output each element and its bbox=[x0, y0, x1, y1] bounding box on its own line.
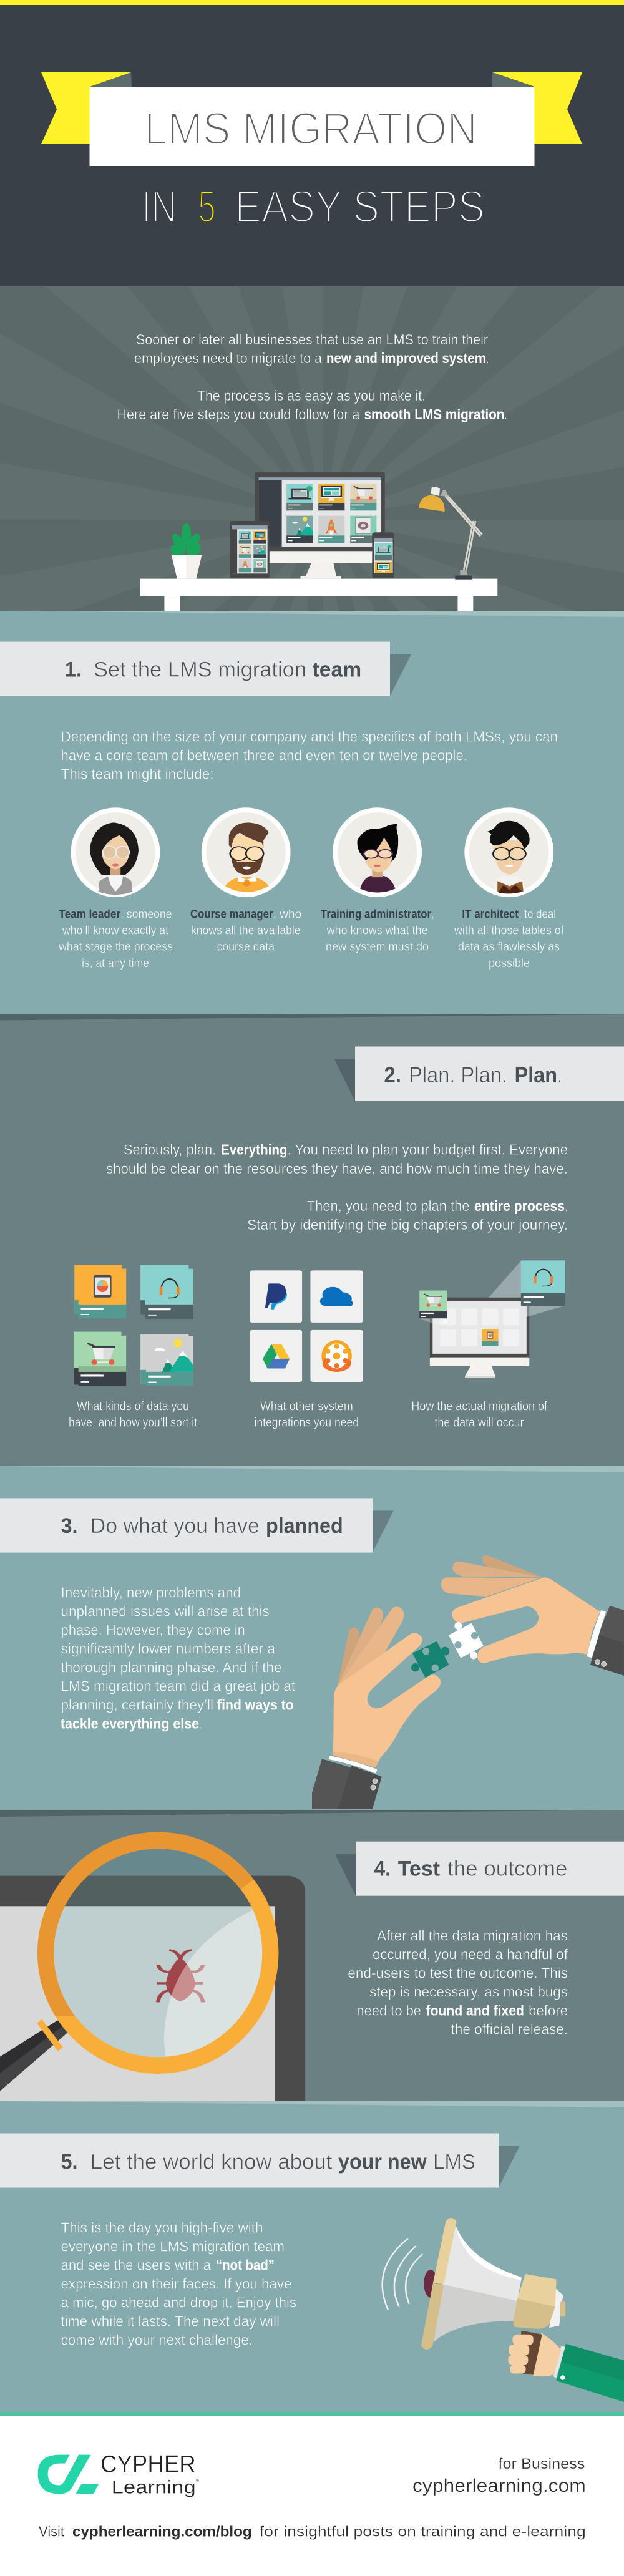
step 4 body text: step is necessary, as most bugs bbox=[369, 1984, 568, 2000]
step 5 body text: a mic, go ahead and drop it. Enjoy this bbox=[61, 2295, 296, 2311]
teal divider bbox=[0, 2412, 624, 2416]
card: moving headset bbox=[521, 1260, 565, 1306]
step 2 body text: entire process bbox=[474, 1198, 565, 1214]
caption: course manager: , who bbox=[273, 907, 301, 921]
caption: course manager bbox=[190, 907, 301, 954]
step 4 body text bbox=[348, 1928, 568, 2038]
logo tile: flower bbox=[310, 1330, 363, 1382]
magnifier ring bbox=[37, 1832, 278, 2074]
logo wordmark bbox=[100, 2451, 199, 2498]
heading: step 4: Test bbox=[398, 1857, 440, 1881]
blog link line: cypherlearning.com/blog bbox=[72, 2524, 252, 2540]
magnifier handle bbox=[0, 2019, 70, 2091]
top yellow bar bbox=[0, 0, 624, 5]
caption: course manager: knows all the available bbox=[191, 924, 301, 938]
icon: migration monitor bbox=[419, 1260, 565, 1378]
caption: data: What kinds of data you bbox=[77, 1400, 189, 1414]
step 3 body text: Inevitably, new problems and bbox=[61, 1585, 241, 1601]
step 3 body text: find ways to bbox=[217, 1697, 294, 1713]
illustration: desk with devices bbox=[140, 472, 497, 611]
avatar: course manager bbox=[202, 807, 291, 897]
heading: step 1 bbox=[0, 642, 411, 696]
caption: integrations bbox=[255, 1400, 359, 1429]
caption: integrations: integrations you need bbox=[255, 1416, 359, 1429]
desk bbox=[140, 579, 497, 611]
tablet frame bbox=[0, 1876, 305, 2101]
step 2 body text: Start by identifying the big chapters of your journey. bbox=[247, 1217, 568, 1233]
panel: header bbox=[0, 0, 624, 286]
step 4 body text: found and fixed bbox=[426, 2003, 524, 2019]
step 5 body text: This is the day you high-five with bbox=[61, 2220, 263, 2236]
card: headset bbox=[140, 1265, 193, 1319]
heading: step 5: LMS bbox=[433, 2151, 475, 2174]
panel: intro bbox=[0, 286, 624, 611]
step 3 body text: . bbox=[199, 1716, 202, 1732]
step 2 illustrations bbox=[74, 1260, 565, 1386]
card: tablet chart bbox=[74, 1265, 126, 1318]
title: LMS MIGRATION: LMS MIGRATION bbox=[144, 104, 477, 154]
step 2 body text: should be clear on the resources they have, and how much time they have. bbox=[106, 1160, 568, 1177]
magnifier lens bbox=[54, 1849, 262, 2057]
step 2 body text: Then, you need to plan the bbox=[307, 1198, 469, 1214]
caption: team leader: , someone bbox=[120, 907, 172, 921]
caption: training administrator: new system must do bbox=[326, 940, 429, 954]
caption: IT architect: data as flawlessly as bbox=[458, 940, 560, 954]
team avatars bbox=[71, 807, 553, 897]
intro text: new and improved system bbox=[326, 350, 486, 366]
illustration: magnifier over tablet bbox=[0, 1832, 306, 2101]
intro text: employees need to migrate to a bbox=[134, 350, 322, 366]
caption: course manager: course data bbox=[217, 940, 275, 954]
blog link line: Visit bbox=[39, 2524, 65, 2540]
step 1 body text bbox=[61, 729, 558, 782]
step 4 body text: end-users to test the outcome. This bbox=[348, 1965, 568, 1981]
icon: integration tiles bbox=[250, 1270, 363, 1382]
caption: training administrator bbox=[321, 907, 434, 954]
step 3 body text: LMS migration team did a great job at bbox=[61, 1678, 296, 1694]
subtitle: in 5 easy steps: IN bbox=[142, 182, 177, 232]
step 3 body text: thorough planning phase. And if the bbox=[61, 1660, 282, 1676]
heading: step 5: 5. bbox=[61, 2151, 77, 2174]
step 1 body text: This team might include: bbox=[61, 766, 213, 782]
caption: team leader: what stage the process bbox=[58, 940, 173, 954]
illustration: hands joining puzzle pieces bbox=[312, 1555, 624, 1809]
hand and sleeve bbox=[508, 2331, 624, 2402]
step 5 body text: and see the users with a bbox=[61, 2257, 211, 2273]
subtitle: in 5 easy steps: EASY STEPS bbox=[235, 182, 485, 232]
card: mountains bbox=[140, 1334, 193, 1386]
step 5 body text: everyone in the LMS migration team bbox=[61, 2238, 285, 2254]
caption: data: have, and how you’ll sort it bbox=[69, 1416, 197, 1429]
blog link line bbox=[39, 2524, 586, 2540]
bug icon bbox=[157, 1950, 203, 2002]
card: moving cart bbox=[419, 1291, 447, 1318]
intro text bbox=[117, 331, 507, 422]
caption: migration bbox=[411, 1400, 547, 1429]
heading: step 2: . bbox=[557, 1063, 562, 1087]
heading: step 4: 4. bbox=[374, 1857, 391, 1881]
heading: step 2: 2. bbox=[384, 1063, 401, 1087]
step 4 body text: before bbox=[529, 2003, 568, 2019]
icon: data kind cards bbox=[74, 1265, 193, 1386]
blog link line: for insightful posts on training and e-learning bbox=[260, 2524, 586, 2540]
step 3 body text: planning, certainly they’ll bbox=[61, 1697, 213, 1713]
avatar captions bbox=[58, 907, 564, 970]
course cards bbox=[286, 484, 376, 543]
website info: cypherlearning.com bbox=[412, 2476, 586, 2496]
intro text: Sooner or later all businesses that use an LMS to train their bbox=[136, 331, 488, 348]
caption: migration: How the actual migration of bbox=[411, 1400, 547, 1414]
caption: training administrator: Training administrator bbox=[321, 907, 431, 921]
heading: step 4 bbox=[335, 1842, 624, 1896]
step 4 body text: After all the data migration has bbox=[377, 1928, 568, 1944]
logo tile: cloud storage bbox=[310, 1270, 363, 1323]
heading: step 3: Do what you have bbox=[90, 1514, 260, 1538]
intro text: The process is as easy as you make it. bbox=[197, 387, 426, 404]
panel: step 1 bbox=[0, 611, 624, 1014]
desk lamp bbox=[419, 487, 482, 580]
heading: step 1: 1. bbox=[65, 658, 82, 681]
caption: team leader: who’ll know exactly at bbox=[62, 924, 168, 938]
step 2 captions bbox=[69, 1400, 547, 1429]
puzzle piece: teal bbox=[411, 1641, 449, 1678]
caption: training administrator: who knows what the bbox=[326, 924, 428, 938]
left hand bbox=[312, 1606, 441, 1809]
caption: team leader: is, at any time bbox=[82, 956, 149, 970]
heading: step 5: your new bbox=[338, 2151, 427, 2174]
caption: data bbox=[69, 1400, 197, 1429]
caption: training administrator: , bbox=[431, 907, 434, 921]
step 5 body text: come with your next challenge. bbox=[61, 2331, 253, 2348]
step 2 body text bbox=[106, 1142, 568, 1233]
website info bbox=[412, 2456, 586, 2496]
step 2 body text: Everything bbox=[221, 1142, 287, 1158]
caption: IT architect: IT architect bbox=[462, 907, 519, 921]
caption: IT architect: with all those tables of bbox=[454, 924, 564, 938]
intro text: smooth LMS migration bbox=[364, 406, 504, 422]
logo mark bbox=[38, 2455, 99, 2494]
subtitle: in 5 easy steps bbox=[142, 182, 485, 232]
subtitle: in 5 easy steps: 5 bbox=[198, 182, 216, 232]
logo wordmark: CYPHER bbox=[100, 2451, 196, 2478]
logo wordmark: Learning bbox=[112, 2477, 196, 2498]
caption: course manager: Course manager bbox=[190, 907, 273, 921]
panel: step 3 bbox=[0, 1466, 624, 1810]
heading: step 1: Set the LMS migration bbox=[94, 658, 306, 681]
banner ribbon bbox=[41, 72, 582, 166]
phone device bbox=[372, 532, 394, 578]
step 2 body text: . bbox=[565, 1198, 568, 1214]
logo tile: drive bbox=[250, 1330, 302, 1382]
caption: integrations: What other system bbox=[260, 1400, 353, 1414]
puzzle piece: white bbox=[449, 1622, 484, 1659]
step 3 body text: tackle everything else bbox=[61, 1716, 199, 1732]
heading: step 2 bbox=[334, 1047, 624, 1101]
step 5 body text: “not bad” bbox=[216, 2257, 275, 2273]
logo tile: PayPal bbox=[250, 1270, 302, 1323]
step 3 body text: unplanned issues will arise at this bbox=[61, 1603, 270, 1620]
tablet device bbox=[230, 521, 270, 578]
heading: step 5 bbox=[0, 2134, 520, 2187]
avatar: IT architect bbox=[464, 807, 553, 897]
illustration: megaphone with hand bbox=[383, 2218, 624, 2402]
right hand bbox=[441, 1555, 624, 1676]
avatar: team leader bbox=[71, 807, 160, 897]
step 2 body text: Seriously, plan. bbox=[124, 1142, 216, 1158]
panel: step 5 bbox=[0, 2101, 624, 2412]
step 1 body text: have a core team of between three and even ten or twelve people. bbox=[61, 747, 467, 764]
step 3 body text: phase. However, they come in bbox=[61, 1622, 245, 1638]
heading: step 3 bbox=[0, 1498, 394, 1553]
step 4 body text: need to be bbox=[356, 2003, 421, 2019]
caption: IT architect: , to deal bbox=[519, 907, 556, 921]
step 5 body text: expression on their faces. If you have bbox=[61, 2275, 292, 2292]
step 4 body text: occurred, you need a handful of bbox=[373, 1947, 568, 1963]
caption: team leader bbox=[58, 907, 173, 970]
card: shopping cart bbox=[74, 1332, 126, 1386]
step 4 body text: the official release. bbox=[451, 2021, 568, 2038]
heading: step 4: the outcome bbox=[447, 1857, 568, 1881]
heading: step 2: Plan. Plan. bbox=[409, 1063, 507, 1087]
caption: IT architect: possible bbox=[489, 956, 530, 970]
caption: migration: the data will occur bbox=[434, 1416, 524, 1429]
website info: for Business bbox=[498, 2456, 585, 2472]
desktop monitor bbox=[255, 472, 385, 579]
caption: team leader: Team leader bbox=[59, 907, 120, 921]
step 5 body text bbox=[61, 2220, 296, 2348]
megaphone bbox=[421, 2218, 565, 2350]
intro text: . bbox=[486, 350, 489, 366]
panel: step 4 bbox=[0, 1809, 624, 2101]
heading: step 5: Let the world know about bbox=[90, 2151, 333, 2174]
step 3 body text bbox=[61, 1585, 296, 1732]
plant bbox=[168, 523, 203, 579]
heading: step 3: planned bbox=[266, 1514, 343, 1538]
step 5 body text: time while it lasts. The next day will bbox=[61, 2313, 280, 2329]
migration light beams bbox=[489, 1261, 564, 1317]
caption: IT architect bbox=[454, 907, 564, 970]
step 3 body text: significantly lower numbers after a bbox=[61, 1641, 275, 1657]
intro text: Here are five steps you could follow for a bbox=[117, 406, 360, 422]
footer bbox=[0, 2412, 624, 2576]
avatar: training administrator bbox=[333, 807, 422, 897]
logo wordmark: ® bbox=[196, 2479, 199, 2483]
panel: step 2 bbox=[0, 1014, 624, 1466]
heading: step 1: team bbox=[313, 658, 361, 681]
intro text: . bbox=[504, 406, 507, 422]
heading: step 2: Plan bbox=[515, 1063, 557, 1087]
step 2 body text: . You need to plan your budget first. Everyone bbox=[287, 1142, 568, 1158]
heading: step 3: 3. bbox=[61, 1514, 77, 1538]
sound waves bbox=[383, 2238, 422, 2310]
step 1 body text: Depending on the size of your company and the specifics of both LMSs, you can bbox=[61, 729, 558, 745]
